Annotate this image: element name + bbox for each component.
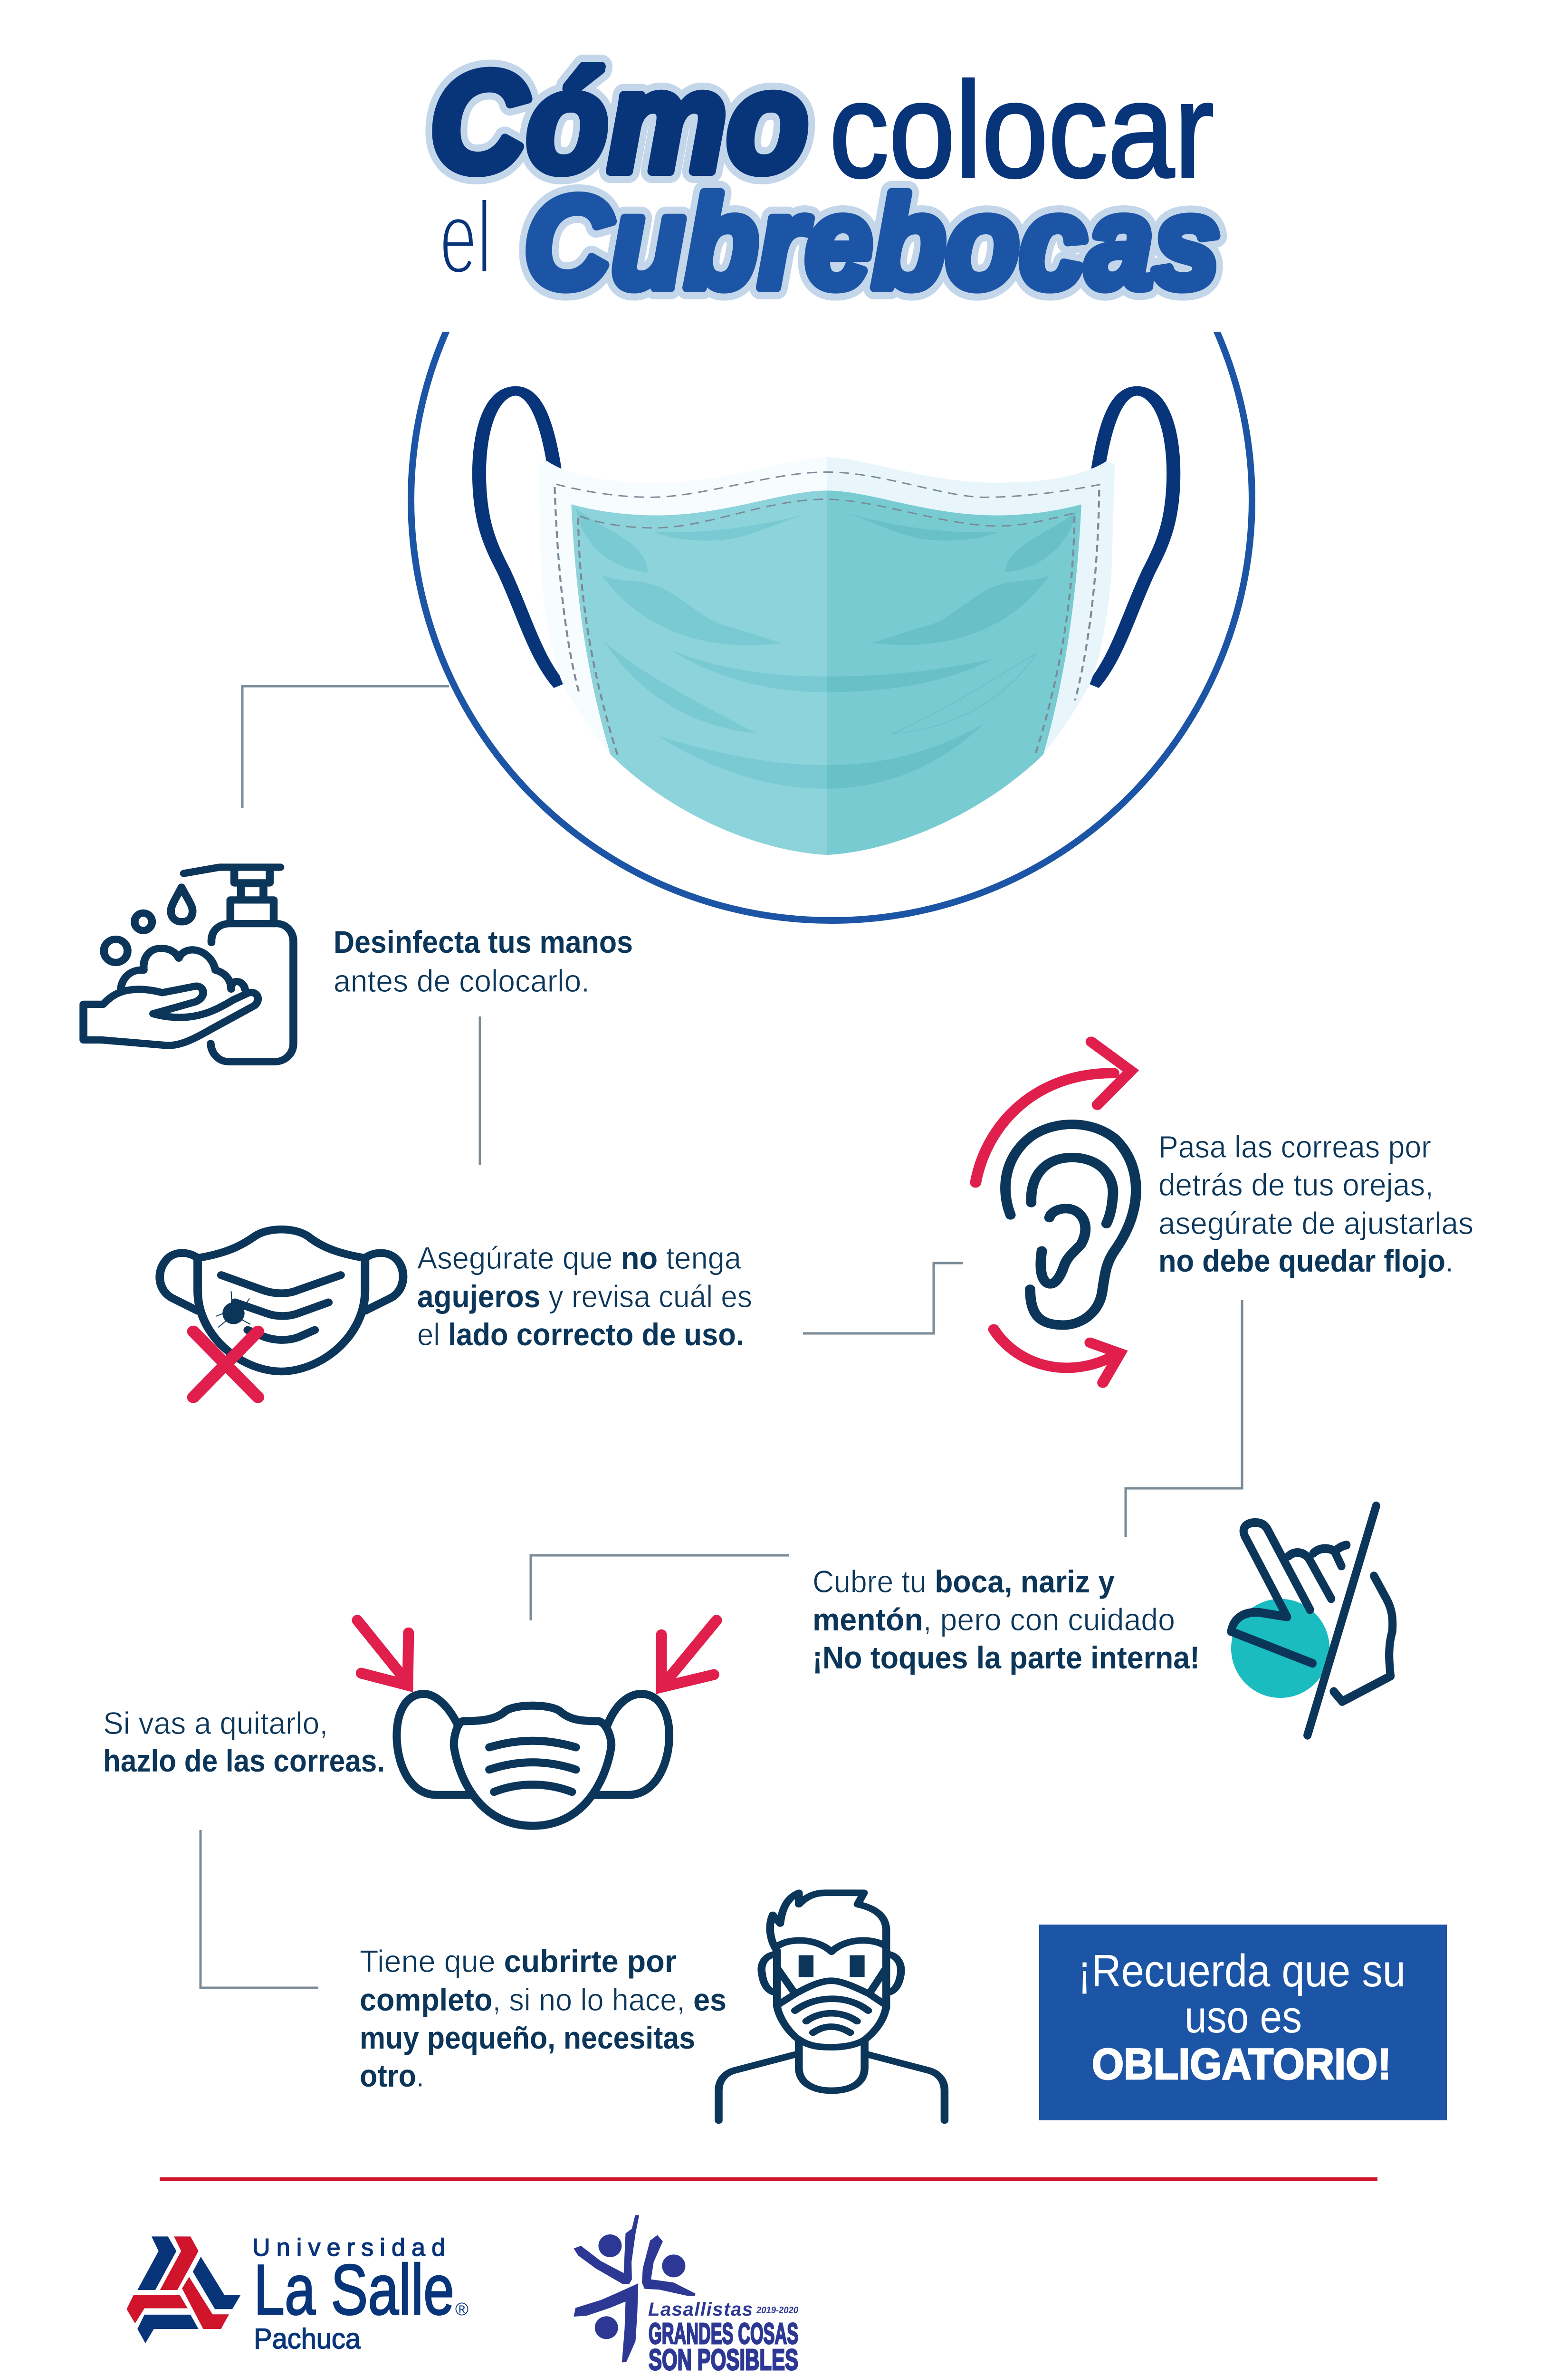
red arrows around the ear: [975, 1042, 1131, 1383]
text: check the mask: Asegúrate que no tenga: [417, 1240, 741, 1275]
logo mark: [126, 2236, 241, 2343]
text: disinfect hands: [334, 924, 633, 998]
text: pass the straps: Pasa las correas por: [1158, 1129, 1431, 1164]
text: cover nose and mouth: ¡No toques la parte interna!: [813, 1640, 1200, 1675]
icon: ear with red arrows: [975, 1042, 1136, 1383]
callout: mandatory use: ¡Recuerda que su: [1078, 1945, 1405, 1996]
text: check the mask: [417, 1240, 752, 1352]
title word: Cubrebocas: Cubrebocas: [524, 170, 1220, 316]
logo text: SON POSIBLES: [649, 2344, 798, 2376]
logo: Universidad La Salle Pachuca: [126, 2234, 468, 2355]
text: check the mask: agujeros y revisa cuál es: [417, 1279, 752, 1314]
text: cover nose and mouth: Cubre tu boca, nariz y: [813, 1564, 1115, 1599]
icon: mask with hole and red cross: [160, 1229, 403, 1397]
text: must cover completely: [360, 1944, 727, 2093]
mask teal body: [571, 490, 1081, 855]
callout: mandatory use: OBLIGATORIO!: [1092, 2040, 1391, 2089]
mask pleats left: [576, 508, 827, 789]
title word: el: el: [440, 180, 492, 295]
mask ear straps: [479, 391, 1174, 686]
text: must cover completely: completo, si no lo hace, es: [360, 1982, 727, 2017]
logo figure: [574, 2215, 696, 2363]
connector: mask check to ear: [803, 1263, 963, 1333]
callout: mandatory use: [1039, 1925, 1447, 2120]
red arrows pointing to straps: [357, 1620, 717, 1687]
icon: person wearing mask: [718, 1893, 945, 2120]
illustration: surgical mask: [479, 391, 1174, 855]
logo: Lasallistas grandes cosas son posibles: [574, 2215, 798, 2376]
logo wordmark: [252, 2234, 468, 2355]
text: remove by straps: hazlo de las correas.: [103, 1743, 385, 1778]
logo wordmark: Pachuca: [254, 2323, 361, 2355]
title word: Cómo: Cómo: [430, 42, 808, 201]
title: [430, 42, 1220, 316]
connector: circle to hands: [242, 686, 449, 808]
title word: Cubrebocas: Cubrebocas: [524, 170, 1220, 316]
text: cover nose and mouth: [813, 1564, 1200, 1675]
logo wordmark: La Salle: [254, 2250, 454, 2329]
red divider: [160, 2177, 1377, 2181]
tear in the mask: [216, 1292, 250, 1327]
logo text: 2019-2020: [756, 2305, 798, 2316]
text: pass the straps: [1158, 1129, 1473, 1278]
text: disinfect hands: Desinfecta tus manos: [334, 924, 633, 959]
logo wordmark: Universidad: [252, 2234, 445, 2261]
text: must cover completely: Tiene que cubrirte por: [360, 1944, 677, 1979]
logo text: Lasallistas: [648, 2299, 753, 2320]
callout: mandatory use: uso es: [1185, 1992, 1302, 2042]
connector: hand text to straps mask: [531, 1555, 789, 1620]
icon: hand sanitizer and hands: [84, 867, 293, 1062]
mask pleats right: [827, 508, 1077, 789]
red cross: [193, 1332, 258, 1397]
mask dashed stitching: [555, 472, 1099, 755]
text: pass the straps: asegúrate de ajustarlas: [1158, 1206, 1473, 1241]
text: pass the straps: detrás de tus orejas,: [1158, 1167, 1434, 1202]
blue circle frame: [408, 332, 1255, 924]
text: check the mask: el lado correcto de uso.: [417, 1317, 744, 1352]
mask white border: [538, 457, 1115, 757]
text: must cover completely: otro.: [360, 2058, 424, 2093]
text: must cover completely: muy pequeño, necesitas: [360, 2020, 695, 2055]
text: disinfect hands: antes de colocarlo.: [334, 963, 590, 998]
icon: mask with red arrows at straps: [357, 1620, 717, 1826]
connector: straps text to fit text: [201, 1830, 318, 1988]
text: pass the straps: no debe quedar flojo.: [1158, 1243, 1453, 1278]
logo text: [648, 2299, 798, 2376]
logo text: GRANDES COSAS: [649, 2318, 798, 2350]
connector: hands to mask check: [479, 1016, 481, 1165]
title word: colocar: colocar: [829, 55, 1214, 206]
icon: hand not touching: [1231, 1506, 1393, 1735]
text: cover nose and mouth: mentón, pero con cuidado: [813, 1602, 1175, 1637]
text: remove by straps: [103, 1705, 385, 1778]
title word: Cómo: Cómo: [430, 42, 808, 201]
connector: ear to hand: [1126, 1300, 1242, 1537]
text: remove by straps: Si vas a quitarlo,: [103, 1705, 328, 1741]
logo wordmark: ®: [455, 2299, 468, 2319]
